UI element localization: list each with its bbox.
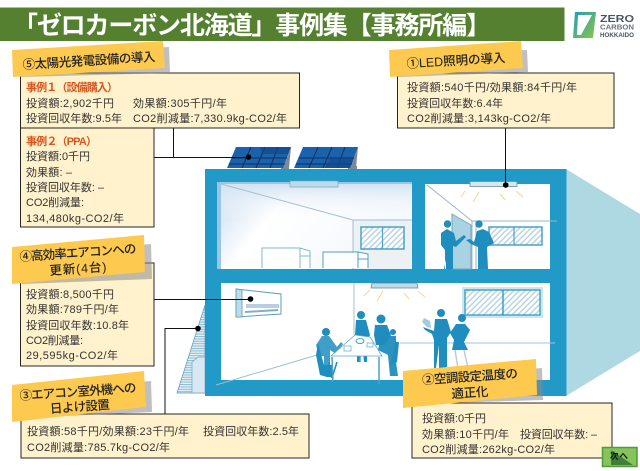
logo: Zero Carbon Hokkaido xyxy=(573,12,634,39)
air conditioner xyxy=(236,289,281,317)
panel: high efficiency air conditioner: CO2削減量: xyxy=(26,333,83,347)
connector: air conditioner xyxy=(154,296,253,302)
panel: outdoor unit shade: 投資回収年数:2.5年 xyxy=(203,424,299,438)
panel: solar power case 2: 事例２（PPA） xyxy=(26,134,97,148)
button: next page: 次へ xyxy=(610,451,628,461)
panel: outdoor unit shade xyxy=(21,414,309,458)
panel: solar power case 1: 効果額:305千円/年 xyxy=(133,96,227,110)
panel: high efficiency air conditioner xyxy=(20,263,154,366)
title bar: 「ゼロカーボン北海道」事例集【事務所編】 xyxy=(13,11,491,40)
heading: high efficiency air conditioner: 更新(4台) xyxy=(49,259,107,278)
panel: high efficiency air conditioner: 効果額:789千円/年 xyxy=(26,302,119,316)
panel: solar power case 2 xyxy=(20,128,154,227)
panel: solar power case 2: 134,480kg-CO2/年 xyxy=(26,211,124,225)
panel: solar power case 2: CO2削減量: xyxy=(26,195,84,209)
heading: LED lighting: ①LED照明の導入 xyxy=(406,50,506,71)
logo: Zero Carbon Hokkaido: ZERO xyxy=(600,14,634,25)
heading: solar power: ⑤太陽光発電設備の導入 xyxy=(22,49,156,72)
panel: high efficiency air conditioner: 投資回収年数:10.8年 xyxy=(26,318,129,332)
panel: solar power case 2: 効果額: – xyxy=(26,165,73,179)
panel: solar power case 2: 投資額:0千円 xyxy=(26,149,90,163)
panel: high efficiency air conditioner: 29,595kg-CO2/年 xyxy=(26,348,118,362)
people: standing man and woman xyxy=(422,309,470,368)
room: upper left xyxy=(217,181,412,269)
people: meeting group at table xyxy=(316,311,399,384)
logo: Zero Carbon Hokkaido: CARBON xyxy=(600,24,634,32)
panel: LED lighting: 投資額:540千円/効果額:84千円/年 xyxy=(407,80,577,94)
panel: solar power case 1: 事例１（設備購入） xyxy=(26,80,118,94)
heading: temperature setting xyxy=(403,359,543,408)
heading: LED lighting xyxy=(389,41,528,77)
panel: solar power case 1: 投資額:2,902千円 xyxy=(26,96,114,110)
panel: LED lighting: CO2削減量:3,143kg-CO2/年 xyxy=(407,111,551,125)
building xyxy=(205,169,566,396)
people: two men talking by the door xyxy=(441,220,494,269)
button: next page xyxy=(602,448,637,466)
panel: outdoor unit shade: CO2削減量:785.7kg-CO2/年 xyxy=(27,440,170,454)
logo: Zero Carbon Hokkaido: HOKKAIDO xyxy=(600,32,634,39)
panel: temperature setting: 効果額:10千円/年 xyxy=(422,427,509,441)
heading: high efficiency air conditioner: ④高効率エアコンへの xyxy=(19,241,137,264)
panel: temperature setting: 投資回収年数: – xyxy=(520,427,598,441)
right side wing of building xyxy=(566,169,640,396)
panel: temperature setting: 投資額:0千円 xyxy=(422,411,486,425)
heading: outdoor unit shade: ③エアコン室外機への xyxy=(19,380,137,403)
connector: solar panels to case boxes xyxy=(154,128,251,160)
heading: solar power xyxy=(12,41,170,77)
connector: outdoor unit shade xyxy=(165,326,201,414)
outdoor unit shade xyxy=(177,305,205,393)
panel: solar power case 1: CO2削減量:7,330.9kg-CO2/年 xyxy=(133,111,287,125)
heading: temperature setting: 適正化 xyxy=(451,384,489,401)
heading: temperature setting: ②空調設定温度の xyxy=(421,366,518,387)
room: upper right xyxy=(425,182,557,269)
panel: high efficiency air conditioner: 投資額:8,500千円 xyxy=(26,287,114,301)
heading: outdoor unit shade xyxy=(12,371,152,422)
panel: LED lighting: 投資回収年数:6.4年 xyxy=(407,96,503,110)
solar panels xyxy=(227,147,358,169)
panel: temperature setting: CO2削減量:262kg-CO2/年 xyxy=(422,442,555,456)
heading: high efficiency air conditioner xyxy=(12,235,152,284)
heading: outdoor unit shade: 日よけ設置 xyxy=(50,398,110,416)
panel: temperature setting xyxy=(412,403,612,458)
panel: outdoor unit shade: 投資額:58千円/効果額:23千円/年 xyxy=(27,424,189,438)
connector: LED lighting xyxy=(503,128,509,188)
panel: solar power case 2: 投資回収年数: – xyxy=(26,180,105,194)
panel: LED lighting xyxy=(398,73,614,128)
panel: solar power case 1: 投資回収年数:9.5年 xyxy=(26,111,122,125)
room: lower floor xyxy=(216,283,555,385)
panel: solar power case 1 xyxy=(20,73,300,128)
